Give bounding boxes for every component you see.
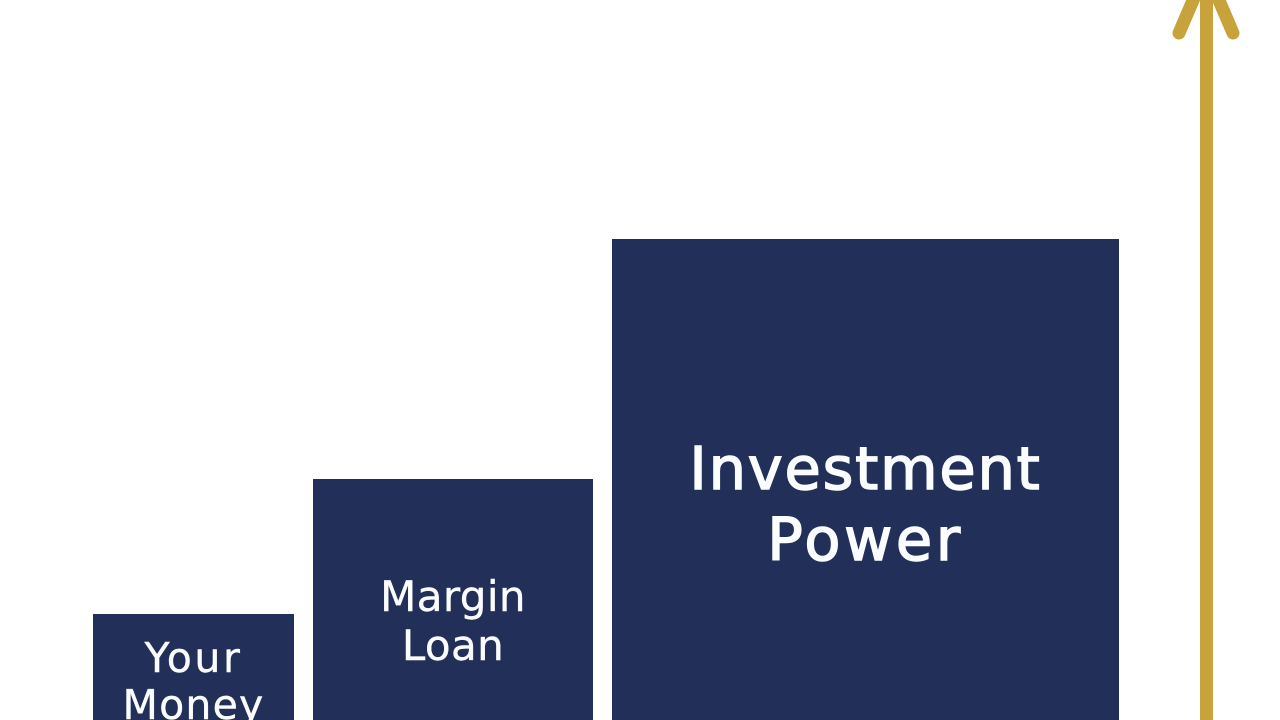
label: Margin Loan: Margin: [380, 572, 526, 621]
label: Margin Loan: [380, 572, 526, 670]
label: Your Money: Your: [145, 634, 242, 682]
label: Investment Power: Investment: [689, 434, 1042, 503]
label: Your Money: [123, 634, 264, 720]
block: Your Money: [93, 614, 294, 720]
label: Margin Loan: Loan: [402, 621, 504, 670]
label: Investment Power: Power: [767, 505, 964, 574]
label: Investment Power: [689, 434, 1042, 574]
block: Margin Loan: [313, 479, 593, 720]
block: Investment Power: [612, 239, 1119, 720]
